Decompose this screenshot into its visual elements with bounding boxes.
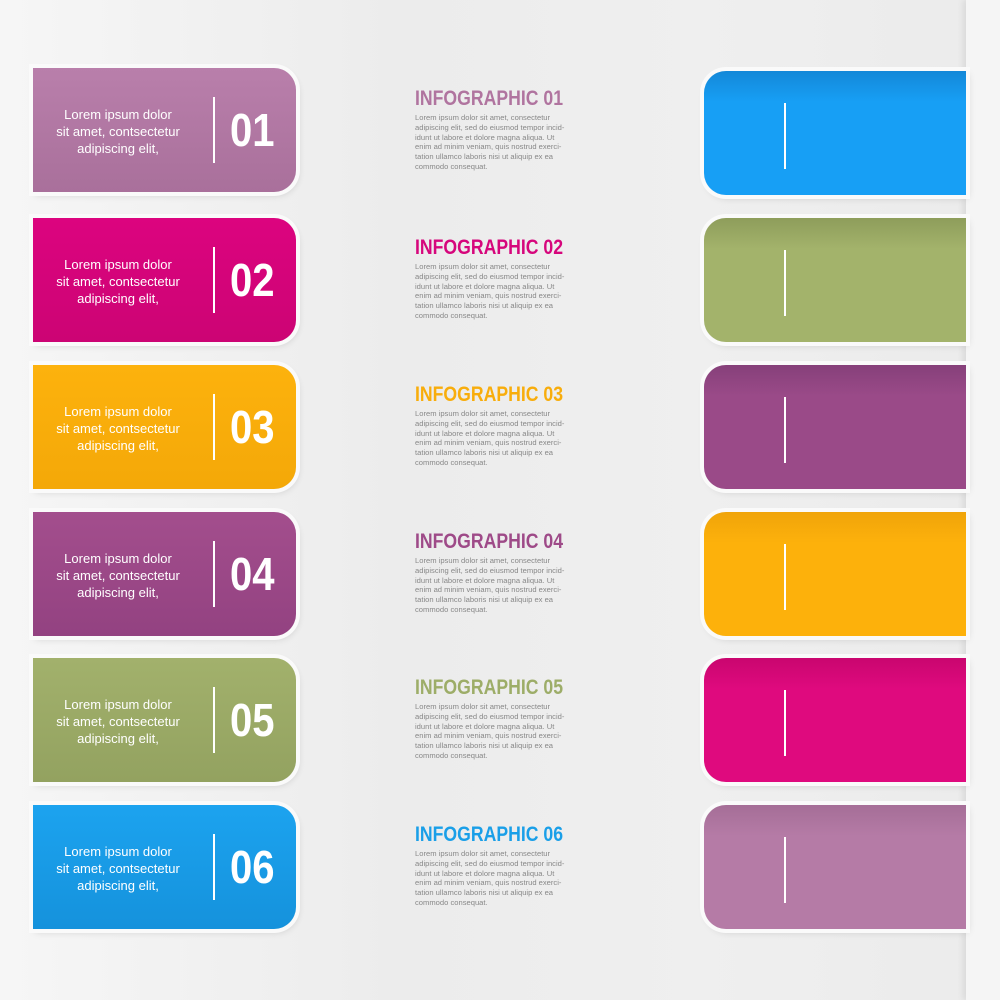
card 03: Lorem ipsum dolor	[64, 404, 172, 419]
right tab green	[704, 218, 966, 342]
card 06: 06	[230, 841, 275, 893]
text block 06: commodo consequat.	[415, 898, 488, 907]
text block 01: Lorem ipsum dolor sit amet, consectetur	[415, 113, 550, 122]
right tab orange	[704, 512, 966, 636]
text block 05: enim ad minim veniam, quis nostrud exerci-	[415, 731, 561, 740]
text block 05: commodo consequat.	[415, 751, 488, 760]
text block 03: Lorem ipsum dolor sit amet, consectetur	[415, 409, 550, 418]
text block 05: adipiscing elit, sed do eiusmod tempor incid-	[415, 712, 564, 721]
text block 01: commodo consequat.	[415, 162, 488, 171]
text block 02: Lorem ipsum dolor sit amet, consectetur	[415, 262, 550, 271]
text block 04	[415, 530, 564, 614]
card 03: 03	[230, 401, 275, 453]
card 02	[33, 218, 296, 342]
card 04: sit amet, contsectetur	[56, 568, 180, 583]
text block 02: INFOGRAPHIC 02	[415, 236, 563, 259]
text block 06: Lorem ipsum dolor sit amet, consectetur	[415, 849, 550, 858]
text block 03: idunt ut labore et dolore magna aliqua. Ut	[415, 429, 554, 438]
text block 06: enim ad minim veniam, quis nostrud exerci-	[415, 878, 561, 887]
text block 02: commodo consequat.	[415, 311, 488, 320]
text block 06	[415, 823, 564, 907]
text block 02: tation ullamco laboris nisi ut aliquip ex ea	[415, 301, 553, 310]
text block 01: adipiscing elit, sed do eiusmod tempor incid-	[415, 123, 564, 132]
card 03: adipiscing elit,	[77, 438, 159, 453]
text block 02: idunt ut labore et dolore magna aliqua. Ut	[415, 282, 554, 291]
text block 04: Lorem ipsum dolor sit amet, consectetur	[415, 556, 550, 565]
text block 01: INFOGRAPHIC 01	[415, 87, 563, 110]
card 06: sit amet, contsectetur	[56, 861, 180, 876]
text block 05: INFOGRAPHIC 05	[415, 676, 563, 699]
card 04: 04	[230, 548, 275, 600]
card 02: sit amet, contsectetur	[56, 274, 180, 289]
card 04: Lorem ipsum dolor	[64, 551, 172, 566]
text block 02: enim ad minim veniam, quis nostrud exerci-	[415, 291, 561, 300]
card 06: adipiscing elit,	[77, 878, 159, 893]
text block 03: adipiscing elit, sed do eiusmod tempor incid-	[415, 419, 564, 428]
text block 04: enim ad minim veniam, quis nostrud exerci-	[415, 585, 561, 594]
card 05: sit amet, contsectetur	[56, 714, 180, 729]
text block 01: enim ad minim veniam, quis nostrud exerci-	[415, 142, 561, 151]
card 05: adipiscing elit,	[77, 731, 159, 746]
card 01: sit amet, contsectetur	[56, 124, 180, 139]
text block 02: adipiscing elit, sed do eiusmod tempor incid-	[415, 272, 564, 281]
card 05: Lorem ipsum dolor	[64, 697, 172, 712]
card 03: sit amet, contsectetur	[56, 421, 180, 436]
right tab purple	[704, 365, 966, 489]
card 05	[33, 658, 296, 782]
text block 01	[415, 87, 564, 171]
text block 06: idunt ut labore et dolore magna aliqua. Ut	[415, 869, 554, 878]
card 01: 01	[230, 104, 275, 156]
card 05: 05	[230, 694, 275, 746]
text block 04: idunt ut labore et dolore magna aliqua. Ut	[415, 576, 554, 585]
card 06: Lorem ipsum dolor	[64, 844, 172, 859]
text block 01: idunt ut labore et dolore magna aliqua. Ut	[415, 133, 554, 142]
card 04	[33, 512, 296, 636]
card 03	[33, 365, 296, 489]
text block 03: enim ad minim veniam, quis nostrud exerci-	[415, 438, 561, 447]
text block 04: commodo consequat.	[415, 605, 488, 614]
card 01: Lorem ipsum dolor	[64, 107, 172, 122]
text block 05: idunt ut labore et dolore magna aliqua. Ut	[415, 722, 554, 731]
text block 04: INFOGRAPHIC 04	[415, 530, 563, 553]
text block 05: tation ullamco laboris nisi ut aliquip ex ea	[415, 741, 553, 750]
text block 02	[415, 236, 564, 320]
card 02: 02	[230, 254, 275, 306]
text block 05: Lorem ipsum dolor sit amet, consectetur	[415, 702, 550, 711]
text block 01: tation ullamco laboris nisi ut aliquip ex ea	[415, 152, 553, 161]
card 01: adipiscing elit,	[77, 141, 159, 156]
right tab mauve	[704, 805, 966, 929]
text block 05	[415, 676, 564, 760]
text block 04: tation ullamco laboris nisi ut aliquip ex ea	[415, 595, 553, 604]
text block 03: INFOGRAPHIC 03	[415, 383, 563, 406]
text block 06: adipiscing elit, sed do eiusmod tempor incid-	[415, 859, 564, 868]
text block 06: tation ullamco laboris nisi ut aliquip ex ea	[415, 888, 553, 897]
card 02: adipiscing elit,	[77, 291, 159, 306]
card 02: Lorem ipsum dolor	[64, 257, 172, 272]
text block 03: tation ullamco laboris nisi ut aliquip ex ea	[415, 448, 553, 457]
card 06	[33, 805, 296, 929]
right tab blue	[704, 71, 966, 195]
text block 04: adipiscing elit, sed do eiusmod tempor incid-	[415, 566, 564, 575]
right tab magenta	[704, 658, 966, 782]
text block 06: INFOGRAPHIC 06	[415, 823, 563, 846]
text block 03	[415, 383, 564, 467]
card 04: adipiscing elit,	[77, 585, 159, 600]
card 01	[33, 68, 296, 192]
text block 03: commodo consequat.	[415, 458, 488, 467]
